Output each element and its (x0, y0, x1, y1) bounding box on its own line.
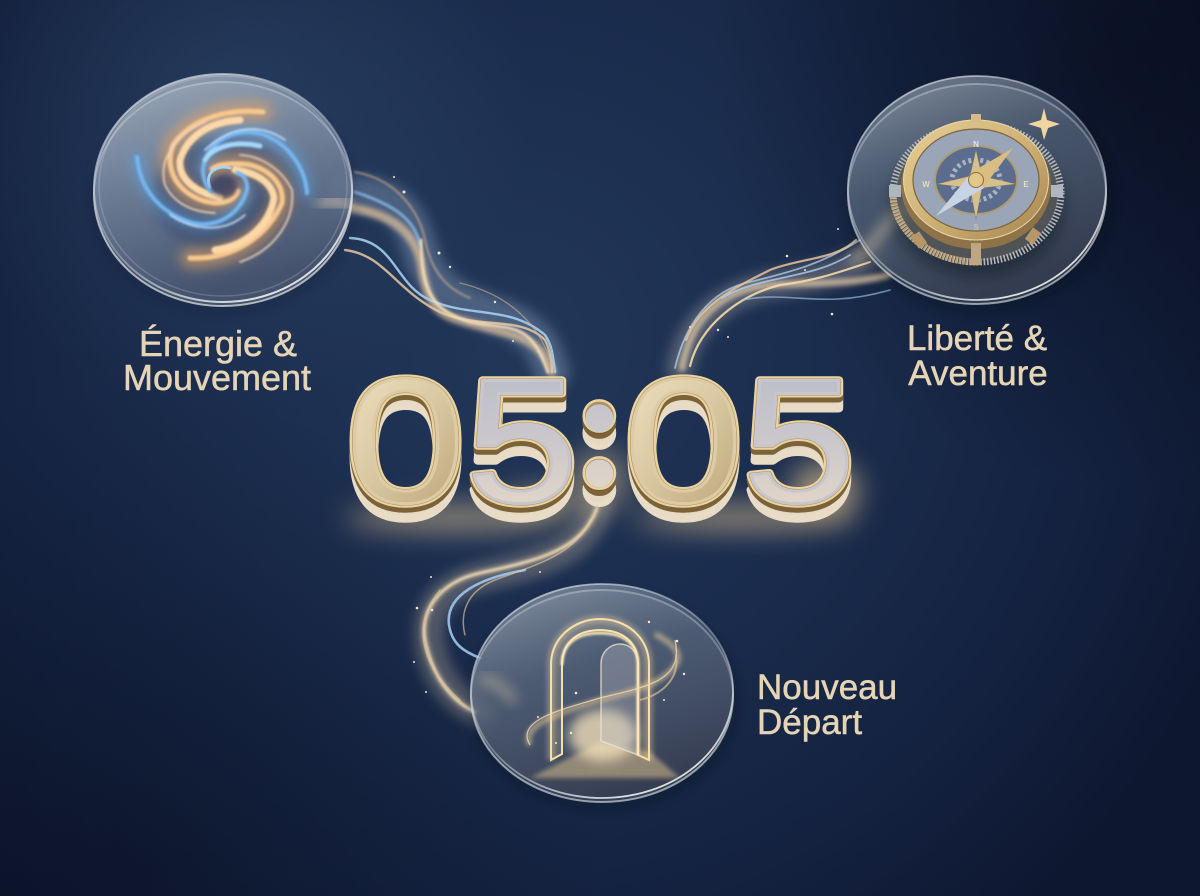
panel: energy disc (92, 74, 356, 312)
digit face: : (571, 333, 629, 523)
compass letters: E (1023, 180, 1029, 189)
digit inner line: 0 (624, 342, 743, 540)
digit rim (346, 326, 855, 540)
flow stream: clock to new start disc (423, 508, 597, 712)
label: energy and movement: Mouvement (123, 357, 311, 398)
digit depth: : (570, 332, 630, 530)
light smear on energy disc (318, 201, 350, 206)
panel: compass disc (848, 76, 1112, 310)
icon: compass (889, 114, 1065, 277)
digit rim: : (570, 326, 630, 524)
compass letters: N (973, 140, 979, 149)
flow stream: compass disc to clock (675, 240, 890, 368)
label: new start: Départ (757, 703, 862, 742)
light smear on door disc (480, 680, 515, 702)
digit extrusion: 0 (624, 357, 743, 555)
digit face (346, 333, 855, 540)
compass letters: W (922, 180, 930, 189)
compass rose (936, 148, 1016, 219)
digit inner line: 0 (346, 342, 465, 540)
label: new start (757, 668, 897, 742)
digit extrusion (346, 343, 855, 555)
label: new start: Nouveau (757, 668, 897, 707)
digit face: 5 (466, 343, 578, 540)
label: freedom and adventure: Aventure (908, 354, 1048, 393)
digit depth: 5 (743, 348, 855, 545)
icon: energy swirl (137, 111, 307, 262)
flow stream: energy disc to clock (345, 172, 555, 372)
label: freedom and adventure: Liberté & (907, 319, 1047, 358)
compass letters: S (973, 223, 979, 232)
digit face: 5 (743, 343, 855, 540)
light smear on compass disc (850, 205, 905, 262)
digit depth: 0 (624, 347, 743, 545)
label: energy and movement (123, 323, 311, 398)
digit rim: 5 (466, 343, 578, 540)
digit extrusion: 5 (743, 358, 855, 555)
digit extrusion: 0 (346, 357, 465, 555)
icon: glowing door (527, 619, 685, 778)
panel: new start disc (471, 584, 737, 808)
digit depth: 5 (466, 348, 578, 545)
label: freedom and adventure (907, 319, 1048, 393)
digit rim: 0 (346, 342, 465, 540)
digit inner line: 5 (466, 343, 578, 540)
digit inner line (346, 326, 855, 540)
label: energy and movement: Énergie & (139, 323, 297, 364)
clock time 05:05 (345, 326, 860, 555)
icon: star (1028, 108, 1060, 140)
sparkle particles (393, 176, 839, 693)
digit face: 0 (346, 342, 465, 540)
digit rim: 0 (624, 342, 743, 540)
digit extrusion: 5 (466, 358, 578, 555)
digit depth: 0 (346, 347, 465, 545)
digit face: 0 (624, 342, 743, 540)
digit glow (345, 448, 860, 530)
digit inner line: : (570, 326, 630, 524)
digit extrusion: : (570, 343, 630, 541)
compass lugs (889, 114, 1063, 265)
compass letters (922, 140, 1029, 232)
digit rim: 5 (743, 343, 855, 540)
digit depth (346, 332, 855, 545)
digit inner line: 5 (743, 343, 855, 540)
